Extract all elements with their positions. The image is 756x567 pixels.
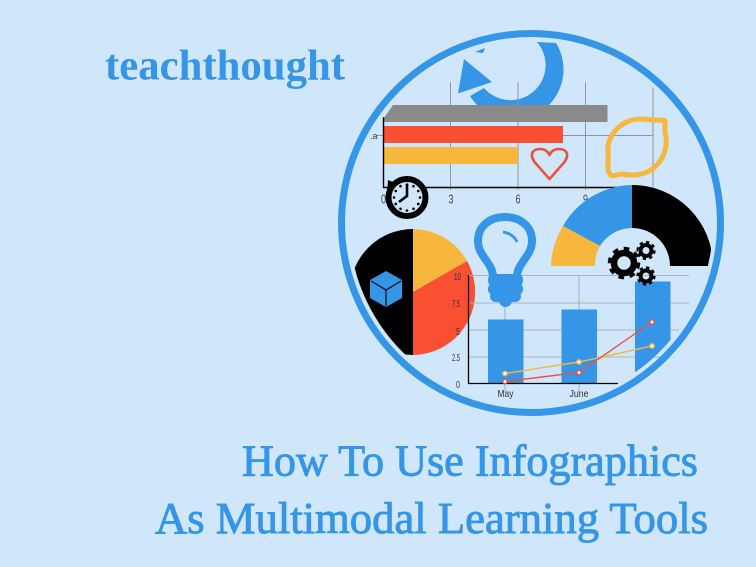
combo chart: [452, 272, 670, 400]
line series: yellow: [503, 344, 654, 376]
axis tick labels: .a: [370, 131, 378, 141]
y axis labels: [452, 272, 461, 391]
bar: gray: [384, 105, 608, 122]
pie slice: yellow: [413, 229, 467, 292]
line series: red: [503, 320, 654, 384]
title: As Multimodal Learning Tools: [155, 494, 708, 543]
y axis labels: 2.5: [452, 353, 460, 364]
axis tick labels: 9: [583, 192, 588, 206]
icon: light bulb: [478, 217, 532, 307]
axis tick labels: 3: [448, 192, 454, 206]
y axis labels: 0: [456, 380, 460, 391]
axis tick labels: 0: [381, 192, 386, 206]
chart axes: [468, 275, 618, 384]
gauge segment: yellow: [551, 226, 600, 266]
gauge segment: black: [632, 185, 713, 266]
pie chart: [350, 229, 475, 355]
blue circle ring: [342, 34, 720, 412]
y axis labels: 10: [454, 272, 461, 283]
x axis labels: June: [570, 389, 589, 400]
axis tick labels: 6: [516, 192, 521, 206]
icon: lemon outline: [608, 119, 666, 176]
bar: yellow: [384, 147, 518, 164]
pie slice: black: [350, 229, 413, 355]
icon: gears: [610, 242, 654, 284]
title: How To Use Infographics: [242, 436, 698, 486]
horizontal bar chart: [370, 82, 653, 206]
y axis labels: 5: [456, 327, 460, 338]
bar: red: [384, 126, 563, 143]
combo chart grid: [468, 275, 689, 392]
y axis labels: 7.5: [452, 299, 460, 310]
icon: circular arrow: [458, 42, 564, 120]
x axis labels: [498, 389, 589, 400]
axis tick labels: [370, 131, 588, 206]
donut gauge chart: [551, 185, 713, 266]
bar: July, cut off by circle: [635, 282, 670, 372]
icon: clock with back arrow: [387, 179, 426, 216]
pie slice: red: [413, 261, 475, 355]
gauge segment: blue: [563, 185, 632, 246]
infographic canvas: [106, 30, 724, 543]
bar: May: [488, 320, 524, 384]
brand name: teachthought: teachthought: [105, 42, 346, 90]
icon: heart: [532, 149, 567, 179]
bar: June: [562, 310, 597, 384]
chart axes: [384, 117, 620, 188]
x axis labels: May: [498, 389, 514, 400]
circular illustration: [342, 34, 720, 412]
icon: blue cube: [370, 271, 402, 307]
title: [155, 436, 708, 543]
